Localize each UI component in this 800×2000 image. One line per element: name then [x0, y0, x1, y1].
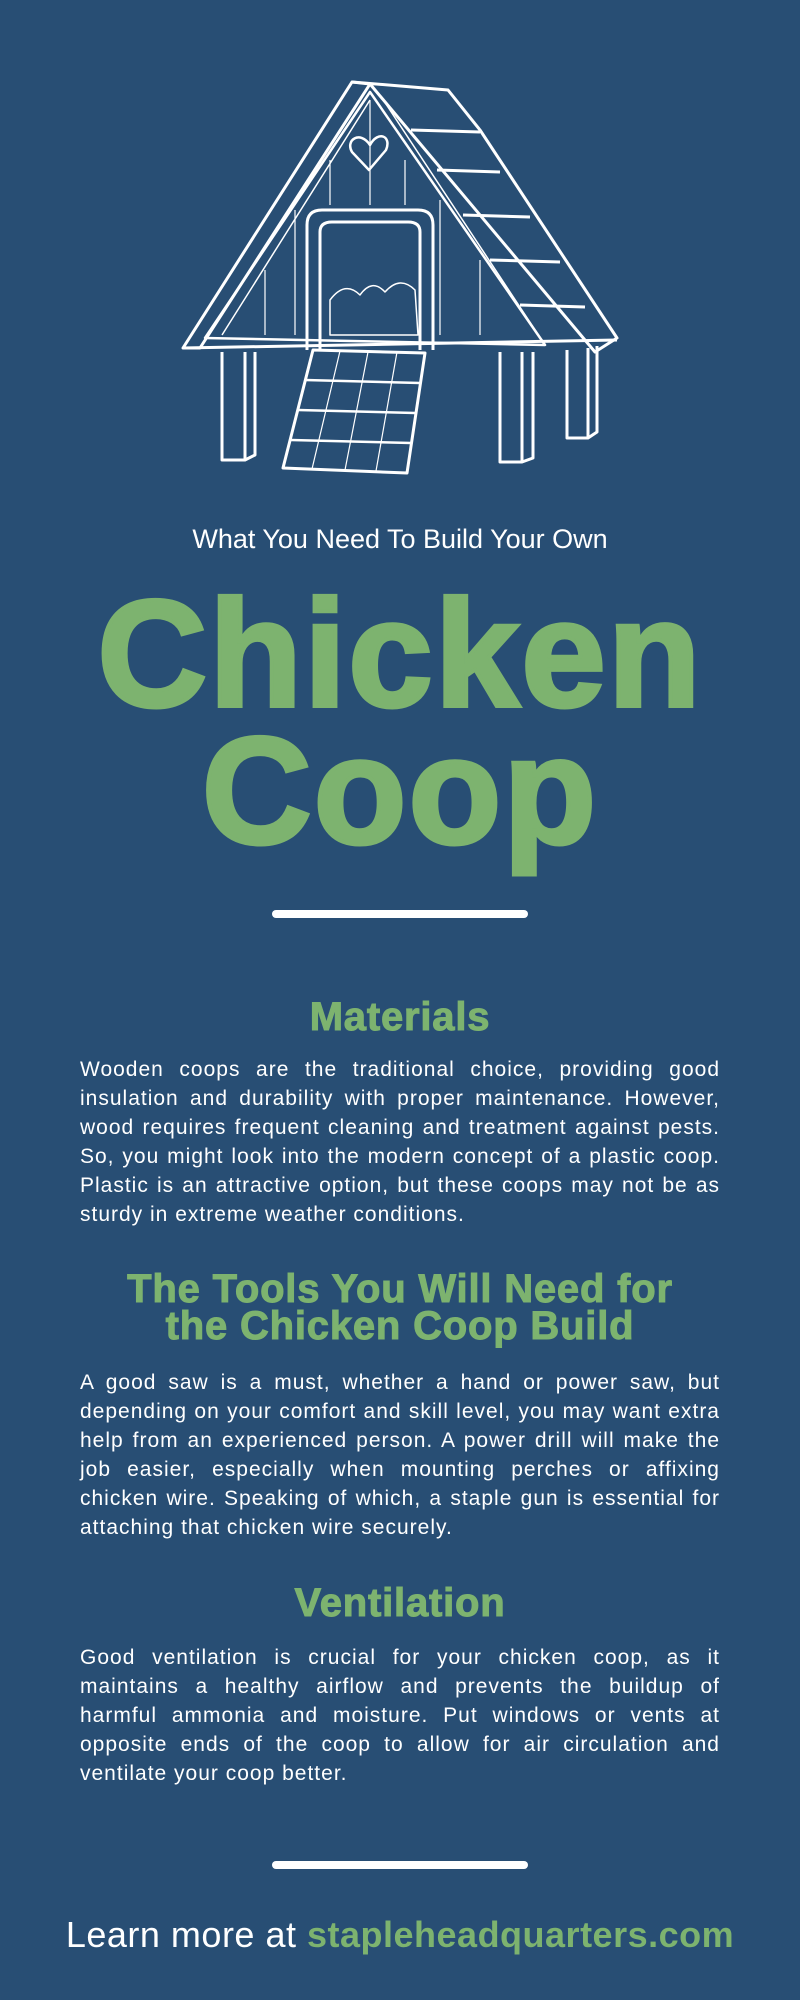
text: materials: Wooden coops are the traditional choice, providing good insulation and durability with proper maintenance. However, wood requires frequent cleaning and treatment against pests. So, you might look into the modern concept of a plastic coop. Plastic is an attractive option, but these coops may not be as sturdy in extreme weather conditions. [80, 1058, 720, 1226]
divider [272, 910, 528, 918]
title line 1: Chicken [97, 569, 703, 739]
title line 2: Coop [202, 706, 598, 876]
subtitle: What You Need To Build Your Own [192, 524, 608, 554]
heading: tools: The Tools You Will Need for [127, 1267, 673, 1311]
divider [272, 1861, 528, 1869]
footer: Learn more at stapleheadquarters.com [66, 1914, 734, 1955]
icon: chicken coop illustration [182, 80, 619, 474]
heading: tools: the Chicken Coop Build [166, 1304, 634, 1348]
heading: tools [127, 1267, 673, 1348]
heading: materials: Materials [310, 995, 490, 1039]
text: ventilation: Good ventilation is crucial for your chicken coop, as it maintains a healthy airflow and prevents the buildup of harmful ammonia and moisture. Put windows or vents at opposite ends of the coop to allow for air circulation and ventilate your coop better. [80, 1646, 720, 1785]
text: tools: A good saw is a must, whether a hand or power saw, but depending on your comfort and skill level, you may want extra help from an experienced person. A power drill will make the job easier, especially when mounting perches or affixing chicken wire. Speaking of which, a staple gun is essential for attaching that chicken wire securely. [80, 1371, 720, 1539]
heading: ventilation: Ventilation [294, 1581, 506, 1625]
